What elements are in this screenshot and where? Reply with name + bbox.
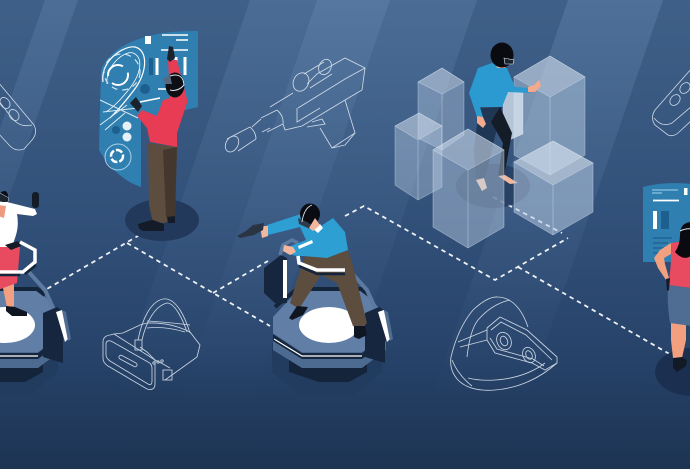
icon: controller outline left [0, 82, 36, 150]
icon: VR headset outline right [451, 297, 557, 390]
arcade rail: center left pad [264, 240, 298, 304]
dashed connector lines [40, 197, 673, 356]
hexagon ring front [298, 256, 345, 274]
platform: left [0, 270, 71, 395]
person: woman in blue top [456, 42, 541, 208]
panel: translucent boxes back [395, 56, 585, 200]
person: woman on left platform [0, 191, 39, 316]
icon: VR headset outline left [103, 299, 200, 389]
hexagon ring back [298, 240, 338, 255]
panel: curved hologram screen [99, 31, 198, 187]
person: man in red shirt [125, 46, 199, 241]
icon: gun outline [223, 57, 365, 154]
platform: center [272, 270, 393, 395]
person: man with gun on center platform [237, 204, 367, 339]
person: woman on right [654, 222, 690, 396]
panel: right document screen [643, 183, 690, 262]
panel: translucent boxes front [418, 94, 593, 248]
icon: controller outline right [652, 68, 690, 136]
